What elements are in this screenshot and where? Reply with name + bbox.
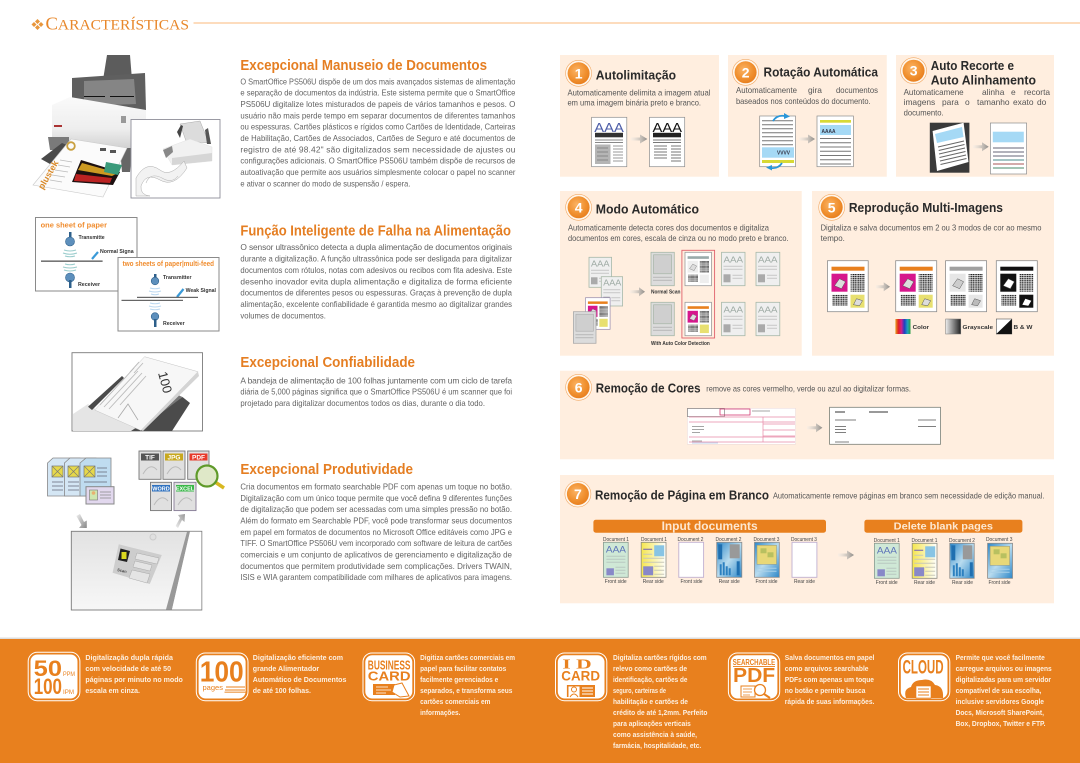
diagram: one sheet of paper: one sheet of paper (41, 220, 107, 230)
icon: ID card (556, 653, 607, 701)
icon: file formats (139, 451, 224, 511)
icon: business card: CARD (368, 668, 410, 683)
output pages: Document 1 (912, 538, 938, 544)
panel: 7 Remoção de Página em Branco (560, 475, 1054, 603)
badge 6 (566, 374, 592, 400)
legend (895, 319, 1033, 334)
diagram: two sheets of paper: Transmitter (163, 275, 192, 281)
text: ID cards: crédito de até 1,2mm. Perfeito (613, 710, 707, 717)
badge 7 (565, 481, 591, 507)
text: Manuseio: de Habilitação, Cartões de Associados, Cartões de Seguro e até documentos de (240, 133, 516, 143)
text: Produtividade: ISIS e WIA garantem compatibilidade com milhares de aplicativos para imagens. (240, 572, 512, 582)
panel: 2 Rotação Automática: gira (808, 85, 822, 95)
text: Manuseio: autoativação que permite aos usuários simplesmente colocar o papel no scanner (240, 167, 516, 177)
panel: 1 Autolimitação (560, 55, 719, 177)
badge 5: 5 (828, 199, 836, 215)
output pages: Document 3 (986, 537, 1013, 543)
image: paper tray photo: 100 (155, 370, 175, 395)
panel: 3 Auto Recorte: alinha (982, 87, 1005, 97)
icon: ID card: I D (562, 657, 592, 672)
input pages: Rear side (794, 579, 815, 585)
legend: Grayscale (962, 325, 993, 331)
badge 7: 7 (574, 486, 582, 502)
text: Produtividade: documentos que permitem produtividade sem complicações. Drivers TWAIN, (240, 561, 512, 571)
arrow (973, 142, 989, 151)
text: Função Inteligente: alimentação, excelente confiabilidade é garantida mesmo ao digitalizar grandes (240, 299, 512, 309)
panel: 3 Auto Recorte: imagens (904, 97, 935, 107)
heading: Excepcional Confiabilidade: Excepcional Confiabilidade (240, 355, 415, 371)
badge 4: 4 (575, 199, 583, 215)
panel: 3 Auto Recorte: tamanho (977, 97, 1010, 107)
panel: 5 Reprodução Multi-Imagens (812, 191, 1054, 356)
text: ID cards (613, 655, 707, 750)
text: duplex speed (85, 655, 183, 695)
panel: 7 Remoção de Página em Branco: Automaticamente remove páginas em branco sem necessidade de edição manual. (773, 490, 1044, 500)
document stack: AAA (603, 279, 622, 288)
icon: file formats: EXCEL (176, 486, 195, 492)
text: ID cards: para aplicações verticais (613, 721, 691, 728)
input pages: Document 1 (641, 537, 667, 543)
diagram: one sheet of paper: Transmitte (78, 235, 105, 241)
text: Confiabilidade: projetado para digitalizar documentos todos os dias, durante o dia todo. (240, 398, 485, 408)
output pages: Rear side (914, 580, 935, 586)
text: cloud: Box, Dropbox, Twitter e FTP. (956, 721, 1046, 728)
input pages: Document 3 (791, 537, 817, 543)
arrow (799, 134, 815, 144)
icon: file formats: WORD (152, 486, 170, 492)
text: Manuseio (240, 76, 516, 188)
input pages: Document 2 (678, 537, 704, 543)
text: Produtividade: comerciais e um conjunto de aplicativos de gerenciamento e digitalização de (240, 550, 512, 560)
scan results: AAA (724, 255, 744, 264)
text: Manuseio: usuário não mais perde tempo em separar documentos de diferentes tamanhos (240, 110, 515, 120)
arrow (807, 423, 822, 432)
badge 1 (566, 60, 592, 86)
badge 3: 3 (910, 63, 918, 79)
input pages: Document 1 (603, 537, 629, 543)
arrow (630, 287, 645, 296)
text: duplex speed: Digitalização dupla rápida (85, 655, 173, 662)
output pages: Front side (876, 580, 898, 586)
text: business cards: separados, e transforma seus (420, 688, 512, 695)
icon: 100 pages: 100 (200, 657, 244, 689)
arrow (838, 550, 854, 560)
badge 5 (819, 194, 845, 220)
scan results: Normal Scan (651, 289, 680, 295)
panel: 7 Remoção de Página em Branco: Remoção de Página em Branco (595, 487, 769, 502)
panel: 1 Autolimitação: Automaticamente delimita a imagem atual (568, 88, 711, 98)
text: searchable PDF: rápida de suas informações. (785, 699, 874, 706)
text: Manuseio: O SmartOffice PS506U dispõe de um dos mais avançados sistemas de alimentação (240, 76, 516, 86)
bar: delete blank pages (864, 520, 1022, 533)
text: Produtividade (240, 482, 512, 582)
text: cloud (956, 655, 1052, 728)
image: scanner control panel: Scan (117, 567, 128, 574)
text: searchable PDF: como arquivos searchable (785, 666, 869, 673)
text: ID cards: farmácia, hospitalidade, etc. (613, 743, 701, 750)
text: Confiabilidade: A bandeja de alimentação de 100 folhas juntamente com um ciclo de tarefa (240, 375, 512, 385)
scan results (651, 250, 780, 347)
form: colors removed (830, 407, 940, 444)
image: paper tray photo (72, 353, 202, 431)
image: scanner control panel (71, 531, 202, 610)
badge 6: 6 (575, 379, 583, 395)
scan results: With Auto Color Detection (651, 341, 710, 347)
text: searchable PDF: no botão e permite busca (785, 688, 865, 695)
text: Produtividade: Além do formato em Searchable PDF, você pode transformar seus documentos (240, 516, 512, 526)
text: ID cards: relevo como cartões de (613, 666, 687, 673)
output pages: Document 1 (874, 538, 900, 544)
text: Função Inteligente: volumes de documentos. (240, 310, 326, 320)
panel: 3 Auto Recorte (896, 55, 1054, 177)
diagram: two sheets of paper: Receiver (163, 321, 185, 327)
document stack: AAA (591, 259, 610, 268)
text: ADF: grande Alimentador (253, 666, 319, 673)
icon: 50 PPM 100 IPM (28, 652, 80, 701)
document: original (592, 117, 627, 167)
icon: searchable PDF: PDF (733, 665, 775, 687)
text: ID cards: habilitação e cartões de (613, 699, 688, 706)
document: source (828, 261, 868, 312)
document: binary (650, 117, 685, 167)
icon: 50 PPM 100 IPM: 100 (34, 674, 62, 699)
panel: 2 Rotação Automática: baseados nos conteúdos do documento. (736, 96, 871, 106)
text: Produtividade: em papel em formatos de documentos no Microsoft Office editáveis como JPG e (240, 527, 512, 537)
input pages: Front side (756, 579, 778, 585)
text: cloud: digitalizadas para um servidor (956, 677, 1051, 684)
bar: input documents: Input documents (662, 521, 758, 533)
panel: 3 Auto Recorte: o (965, 97, 970, 107)
output pages: Document 2 (949, 538, 975, 544)
diagram: two sheets of paper: two sheets of paper|multi-feed (123, 259, 214, 268)
form: with colors (687, 408, 796, 444)
panel: 6 Remoção de Cores: remove as cores vermelho, verde ou azul ao digitalizar formas. (706, 384, 911, 394)
panel: 1 Autolimitação: em uma imagem binária preto e branco. (568, 98, 701, 108)
text: Função Inteligente: documentos de diferentes pesos ou espessuras. Graças à prevenção de dupla (240, 288, 512, 298)
output pages: Front side (988, 580, 1011, 586)
text: Função Inteligente (240, 242, 512, 320)
scan results: AAA (724, 305, 744, 314)
text: business cards: cartões comerciais em (420, 699, 490, 706)
legend: Color (913, 325, 930, 331)
icon: scanned documents (48, 458, 114, 504)
scan results: AAA (758, 255, 778, 264)
icon: 50 PPM 100 IPM: IPM (63, 690, 74, 696)
panel: 3 Auto Recorte: documento. (904, 107, 944, 117)
text: Manuseio: configurações adicionais. O SmartOffice PS506U também dispõe de recursos de (240, 156, 516, 166)
document: grayscale (946, 261, 987, 312)
panel: 5 Reprodução Multi-Imagens: Reprodução Multi-Imagens (849, 200, 1003, 215)
icon: business card (363, 653, 415, 701)
panel: 1 Autolimitação: Autolimitação (596, 67, 676, 82)
panel: 2 Rotação Automática (728, 55, 887, 177)
input pages: Rear side (719, 579, 740, 585)
text: cloud: carregue arquivos ou imagens (956, 666, 1052, 673)
input pages: AAA (606, 544, 626, 554)
badge 3 (901, 58, 927, 84)
icon: searchable PDF: SEARCHABLE (733, 658, 776, 667)
text: cloud: Permite que você facilmente (956, 655, 1045, 662)
panel: 3 Auto Recorte: do (1037, 97, 1047, 107)
icon: cloud (898, 653, 950, 701)
icon: file formats: JPG (167, 454, 181, 462)
icon: 100 pages: pages (202, 683, 223, 692)
text: ADF: Automático de Documentos (253, 677, 347, 684)
panel: 3 Auto Recorte: para (942, 97, 959, 107)
icon: file formats: PDF (192, 454, 205, 462)
text: cloud: Docs, Microsoft SharePoint, (956, 710, 1044, 717)
panel: 6 Remoção de Cores (560, 371, 1054, 459)
text: Manuseio: registro de até 98.42" são digitalizados sem necessidade de ajustes ou (240, 144, 516, 154)
text: searchable PDF: Salva documentos em papel (785, 655, 874, 662)
panel: 5 Reprodução Multi-Imagens: Digitaliza e salva documentos em 2 ou 3 modos de cor ao mesmo (821, 222, 1042, 232)
footer band (0, 638, 1080, 763)
panel: 5 Reprodução Multi-Imagens: tempo. (821, 233, 845, 243)
text: duplex speed: escala em cinza. (85, 688, 140, 695)
text: Função Inteligente: O sensor ultrassônico detecta a dupla alimentação de documentos originais (240, 242, 512, 252)
input pages: Front side (680, 579, 703, 585)
document: color (896, 261, 937, 312)
document: binary: AAA (652, 120, 682, 135)
text: searchable PDF (785, 655, 874, 706)
text: Manuseio: e ativar o scanner do modo de suspensão / espera. (240, 178, 410, 188)
panel: 6 Remoção de Cores: Remoção de Cores (596, 380, 700, 395)
heading: Função Inteligente: Função Inteligente de Falha na Alimentação (240, 224, 511, 240)
icon: 50 PPM 100 IPM: PPM (63, 672, 75, 678)
text: Manuseio: PS506U digitalize lotes misturados de papeis de vários tamanhos e pesos. O (240, 99, 516, 109)
document: original: AAA (594, 120, 624, 135)
legend: B & W (1014, 325, 1033, 331)
panel: 2 Rotação Automática: Automaticamente (736, 85, 797, 95)
icon: 50 PPM 100 IPM: 50 (34, 656, 62, 681)
text: ID cards: seguro, carteiras de (613, 688, 666, 695)
panel: 3 Auto Recorte: e (1011, 87, 1016, 97)
title (32, 14, 1080, 34)
icon: business card: BUSINESS (368, 657, 411, 672)
text: searchable PDF: PDFs com apenas um toque (785, 677, 874, 684)
bar: input documents (593, 520, 826, 533)
text: Confiabilidade (240, 375, 512, 408)
text: Função Inteligente: durante a digitalização. A função ultrassônica pode ser desligada para digitalizar (240, 254, 512, 264)
diagram: two sheets of paper (118, 258, 219, 331)
panel: 3 Auto Recorte: Auto Alinhamento (931, 73, 1036, 88)
input pages: Document 3 (754, 537, 780, 543)
text: Manuseio: e separação de documentos da indústria. Este sistema permite que o SmartOffice (240, 88, 516, 98)
document: skewed original (930, 123, 969, 173)
diagram: one sheet of paper: Receiver (78, 282, 101, 288)
panel: 4 Modo Automático: Modo Automático (596, 201, 699, 216)
input pages: Rear side (643, 579, 664, 585)
text: duplex speed: páginas por minuto no modo (85, 677, 183, 684)
document: rotated: VVVV (777, 150, 791, 156)
diagram: one sheet of paper: Normal Signa (100, 249, 134, 255)
text: business cards: informações. (420, 710, 460, 717)
diagram: one sheet of paper (36, 218, 137, 291)
text: business cards: Digitiza cartões comerciais em (420, 655, 515, 662)
panel: 4 Modo Automático: Automaticamente detecta cores dos documentos e digitaliza (568, 222, 769, 232)
badge 2: 2 (742, 64, 750, 80)
bar: delete blank pages: Delete blank pages (894, 520, 993, 532)
text: ID cards: Digitaliza cartões rígidos com (613, 655, 707, 662)
panel: 2 Rotação Automática: documentos (836, 85, 878, 95)
document: black and white (996, 261, 1037, 312)
scan results: AAA (758, 305, 778, 314)
icon: ID card: CARD (561, 668, 600, 684)
document: cropped (990, 123, 1027, 174)
panel: 3 Auto Recorte: recorta (1024, 87, 1050, 97)
panel: 3 Auto Recorte: exato (1013, 97, 1034, 107)
icon: diamonds (32, 19, 44, 30)
text: ID cards: identificação, cartões de (613, 677, 687, 684)
title: CARACTERÍSTICAS (46, 14, 189, 34)
icon: 100 pages (196, 653, 248, 701)
text: cloud: inclusive servidores Google (956, 699, 1044, 706)
document: corrected (817, 116, 853, 167)
panel: 3 Auto Recorte: Auto Recorte e (931, 58, 1014, 73)
text: Produtividade: Digitalização com um único toque permite que você defina 9 diferentes funções (240, 493, 512, 503)
text: Função Inteligente: desenho inovador evita dupla alimentação e digitaliza de forma eficiente (240, 276, 512, 286)
image: scanner photo (33, 55, 220, 198)
output pages: AAA (877, 545, 897, 555)
arrow: into scanner (76, 514, 87, 528)
panel: 3 Auto Recorte: Automaticamene (904, 87, 964, 97)
badge 1: 1 (575, 65, 583, 81)
output pages: Rear side (952, 580, 973, 586)
text: duplex speed: com velocidade de até 50 (85, 666, 171, 673)
text: Manuseio: ou espessuras. Cartões plásticos e rígidos como Cartões de Identidade, Carteiras (240, 122, 515, 132)
input pages (603, 537, 817, 585)
text: Produtividade: TIFF. O SmartOffice PS506U vem incorporado com software de leitura de cartões (240, 538, 512, 548)
document: corrected: AAAA (822, 129, 836, 135)
text: ADF (253, 655, 347, 695)
icon: cloud: CLOUD (903, 657, 944, 678)
panel: 2 Rotação Automática: Rotação Automática (764, 65, 879, 80)
diagram: two sheets of paper: Weak Signal (186, 288, 216, 294)
text: business cards (420, 655, 515, 717)
text: ADF: Digitalização eficiente com (253, 655, 343, 662)
output pages (874, 537, 1013, 586)
input pages: Document 2 (716, 537, 742, 543)
text: business cards: papel para facilitar contatos (420, 666, 506, 673)
text: Produtividade: Cria documentos em formato searchable PDF com apenas um toque no botão. (240, 482, 512, 492)
text: Produtividade: de digitalização que podem ser acessadas com uma simples pressão no botão. (240, 504, 512, 514)
text: ID cards: como assistência à saúde, (613, 732, 697, 739)
panel: 4 Modo Automático: documentos em cores, escala de cinza ou no modo preto e branco. (568, 233, 789, 243)
heading: Excepcional Produtividade: Excepcional Produtividade (240, 462, 413, 478)
arrow (631, 134, 647, 144)
badge 4 (566, 194, 592, 220)
arrow (876, 282, 890, 291)
icon: searchable PDF (728, 653, 780, 701)
text: cloud: compatível de sua escolha, (956, 688, 1041, 695)
image: scanner photo: plustek (36, 158, 61, 191)
text: Confiabilidade: diária de 5,000 páginas significa que o SmartOffice PS506U é um scanner que foi (240, 387, 512, 397)
panel: 4 Modo Automático (560, 191, 802, 356)
text: ADF: de até 100 folhas. (253, 688, 311, 695)
text: business cards: facilmente gerenciados e (420, 677, 498, 684)
document stack (573, 257, 623, 343)
arrow: out of scanner (176, 514, 185, 528)
badge 2 (733, 59, 759, 85)
icon: file formats: TIF (145, 454, 155, 462)
input pages: Front side (605, 579, 627, 585)
heading: Excepcional Manuseio: Excepcional Manuseio de Documentos (240, 58, 487, 74)
document: rotated (760, 113, 796, 170)
text: Função Inteligente: documentos com rótulos, notas com adesivos ou recibos com fita adesiva. Este (240, 265, 512, 275)
